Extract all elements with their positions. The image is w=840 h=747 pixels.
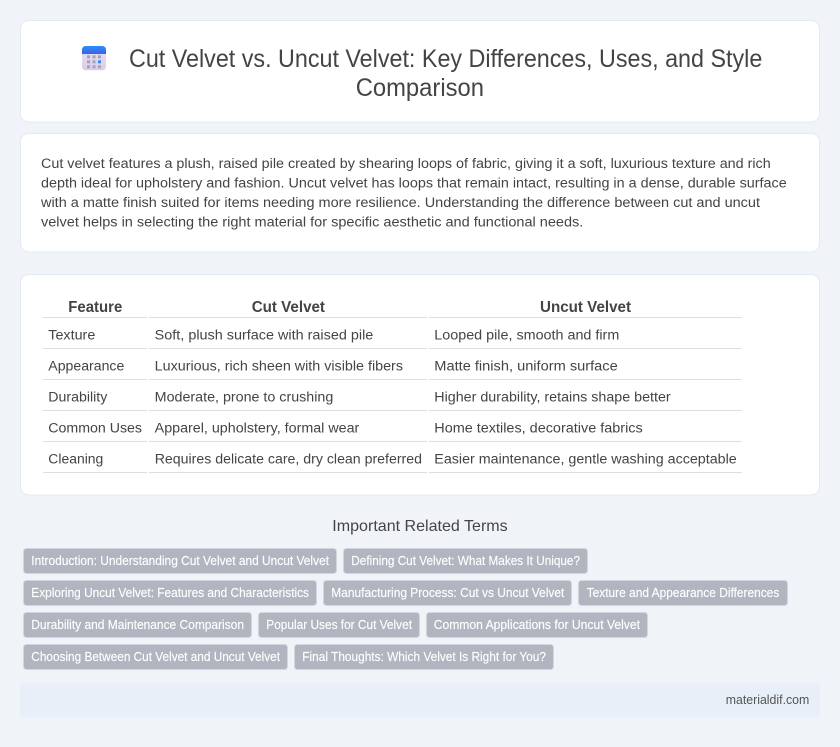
tag [258,612,420,638]
tag [24,644,288,670]
table header row [43,299,742,318]
footer [20,683,820,717]
row: durability: Durability [48,389,108,405]
row: common uses: Apparel, upholstery, formal wear [155,420,360,436]
tag [426,612,648,638]
tag: Common Applications for Uncut Velvet [434,617,640,632]
row: texture: Looped pile, smooth and firm [434,327,619,343]
tag [324,580,572,606]
table header row: Cut Velvet [252,299,325,316]
row: cleaning: Cleaning [48,451,103,467]
row: durability: Higher durability, retains shape better [434,389,671,405]
intro paragraph [40,156,787,230]
title [129,45,762,102]
heading: important related terms: Important Related Terms [332,518,508,535]
tag: Final Thoughts: Which Velvet Is Right for You? [302,649,546,664]
tag [24,612,252,638]
tag: Durability and Maintenance Comparison [31,617,244,632]
intro paragraph: Cut velvet features a plush, raised pile created by shearing loops of fabric, giving it a soft, luxurious texture and rich [41,156,771,172]
intro paragraph: with a matte finish suited for items needing more resilience. Understanding the difference between cut and uncut [40,195,760,211]
panel: comparison table [20,274,820,495]
tag: Introduction: Understanding Cut Velvet and Uncut Velvet [31,553,329,568]
intro paragraph: depth ideal for upholstery and fashion. Uncut velvet has loops that remain intact, resulting in a dense, durable surface [41,176,787,192]
row: appearance [43,358,742,380]
panel: header [20,20,820,122]
row: cleaning [43,451,742,473]
tag [344,548,588,574]
row: durability [43,389,742,411]
tag: Manufacturing Process: Cut vs Uncut Velvet [331,585,565,600]
tag: Exploring Uncut Velvet: Features and Characteristics [31,585,309,600]
row: common uses: Home textiles, decorative fabrics [434,420,643,436]
row: texture [43,327,742,349]
row: common uses: Common Uses [48,420,142,436]
row: appearance: Appearance [48,358,124,374]
tag [24,580,316,606]
tag [294,644,554,670]
row: cleaning: Requires delicate care, dry clean preferred [155,451,422,467]
panel: intro text [20,134,820,252]
tag: Defining Cut Velvet: What Makes It Unique? [351,553,580,568]
row: appearance: Matte finish, uniform surface [434,358,618,374]
row: texture: Soft, plush surface with raised pile [155,327,373,343]
intro paragraph: velvet helps in selecting the right material for specific aesthetic and functional needs. [41,214,583,230]
tag: Texture and Appearance Differences [587,585,780,600]
row: common uses [43,420,742,442]
row: appearance: Luxurious, rich sheen with visible fibers [155,358,403,374]
tag list [24,548,788,670]
tag: Popular Uses for Cut Velvet [266,617,412,632]
row: texture: Texture [48,327,95,343]
table header row: Uncut Velvet [540,299,631,316]
tag [24,548,336,574]
tag: Choosing Between Cut Velvet and Uncut Velvet [31,649,280,664]
title: Cut Velvet vs. Uncut Velvet: Key Differences, Uses, and Style [129,45,762,73]
footer: materialdif.com [726,692,809,707]
icon: calendar [82,46,106,70]
row: cleaning: Easier maintenance, gentle washing acceptable [434,451,737,467]
title: Comparison [356,74,484,102]
row: durability: Moderate, prone to crushing [155,389,333,405]
table header row: Feature [68,299,123,316]
tag [578,580,788,606]
